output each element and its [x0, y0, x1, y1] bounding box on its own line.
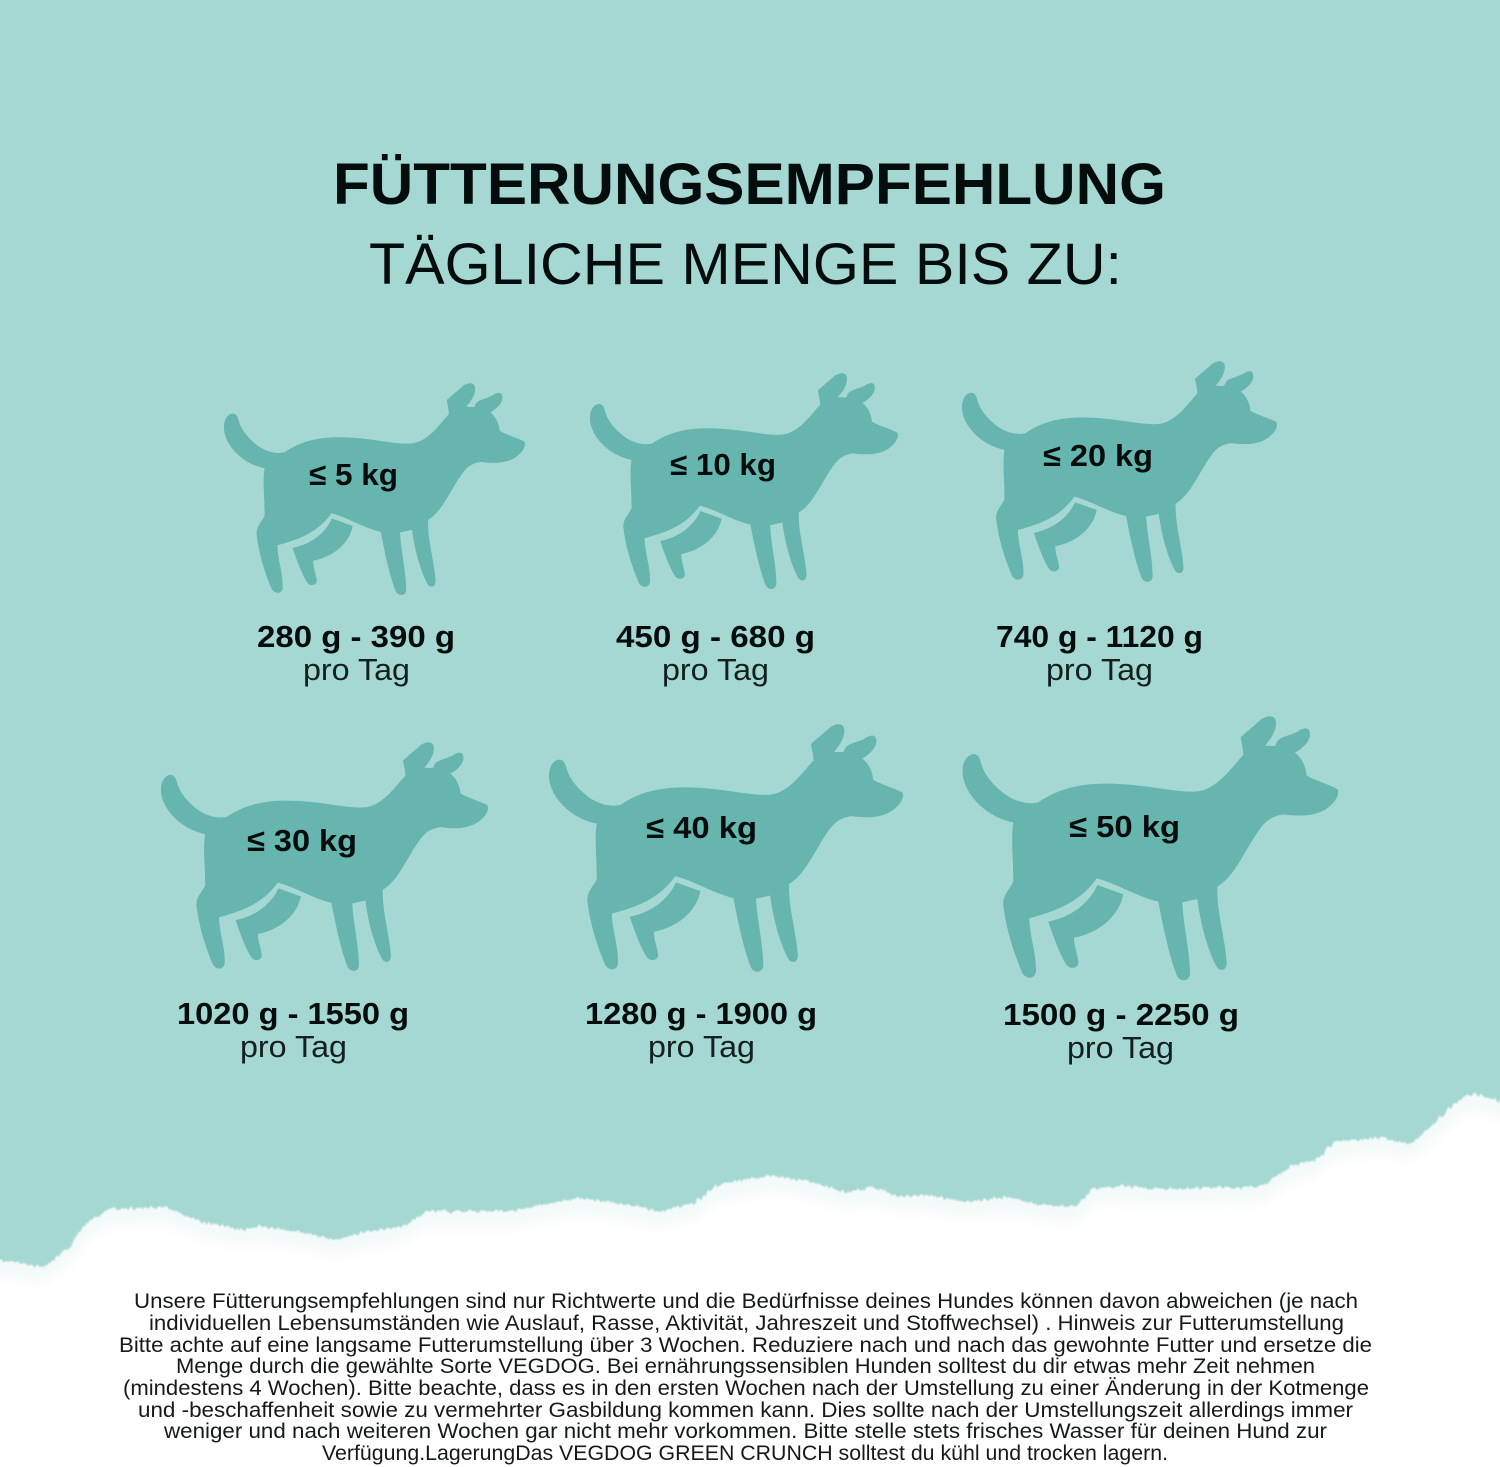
footer text block: weniger und nach weiteren Wochen gar nicht mehr vorkommen. Bitte stelle stets frisches Wasser für deinen Hund zur: [163, 1420, 1327, 1443]
icon: dog silhouette 5 kg: [224, 383, 525, 595]
footer text block: Verfügung.LagerungDas VEGDOG GREEN CRUNCH solltest du kühl und trocken lagern.: [322, 1442, 1168, 1465]
torn paper edge: [0, 1094, 1500, 1467]
per day: pro Tag: [662, 652, 769, 687]
amount: 1500 g - 2250 g: [1003, 997, 1239, 1032]
footer text block: und -beschaffenheit sowie zu vermehrter Gasbildung kommen kann. Dies sollte nach der Umstellungszeit allerdings immer: [138, 1399, 1353, 1422]
title: FÜTTERUNGSEMPFEHLUNG: [333, 152, 1166, 217]
footer text block: individuellen Lebensumständen wie Auslauf, Rasse, Aktivität, Jahreszeit und Stoffwechsel) . Hinweis zur Futterumstellung: [149, 1312, 1344, 1335]
weight label: ≤ 30 kg: [247, 823, 357, 858]
per day: pro Tag: [1046, 652, 1153, 687]
footer text block: Unsere Fütterungsempfehlungen sind nur Richtwerte und die Bedürfnisse deines Hundes können davon abweichen (je nach: [134, 1290, 1358, 1313]
panel: up to 20 kg: [962, 361, 1277, 687]
panel: up to 10 kg: [590, 373, 898, 687]
icon: dog silhouette 10 kg: [590, 373, 898, 589]
icon: dog silhouette 20 kg: [962, 361, 1277, 582]
per day: pro Tag: [303, 652, 410, 687]
footer text block: Bitte achte auf eine langsame Futterumstellung über 3 Wochen. Reduziere nach und nach das gewohnte Futter und ersetze die: [119, 1334, 1372, 1357]
amount: 450 g - 680 g: [616, 619, 815, 654]
weight label: ≤ 5 kg: [309, 457, 398, 492]
amount: 280 g - 390 g: [257, 619, 455, 654]
footer text block: (mindestens 4 Wochen). Bitte beachte, dass es in den ersten Wochen nach der Umstellung zu einer Änderung in der Kotmenge: [123, 1377, 1369, 1400]
per day: pro Tag: [1067, 1030, 1174, 1065]
weight label: ≤ 50 kg: [1069, 809, 1180, 844]
per day: pro Tag: [240, 1029, 347, 1064]
panel: up to 5 kg: [224, 383, 525, 687]
footer text block: [119, 1290, 1372, 1465]
icon: dog silhouette 30 kg: [161, 742, 488, 971]
amount: 740 g - 1120 g: [996, 619, 1203, 654]
weight label: ≤ 20 kg: [1043, 438, 1153, 473]
panel: up to 30 kg: [161, 742, 488, 1064]
footer text block: Menge durch die gewählte Sorte VEGDOG. Bei ernährungssensiblen Hunden solltest du dir etwas mehr Zeit nehmen: [176, 1355, 1315, 1378]
icon: dog silhouette 40 kg: [549, 724, 903, 972]
icon: dog silhouette 50 kg: [963, 716, 1338, 980]
subtitle: TÄGLICHE MENGE BIS ZU:: [369, 232, 1122, 297]
per day: pro Tag: [648, 1029, 755, 1064]
panel: up to 40 kg: [549, 724, 903, 1064]
panel: up to 50 kg: [963, 716, 1338, 1065]
amount: 1020 g - 1550 g: [177, 996, 409, 1031]
amount: 1280 g - 1900 g: [585, 996, 817, 1031]
weight label: ≤ 40 kg: [646, 810, 757, 845]
weight label: ≤ 10 kg: [670, 447, 776, 482]
